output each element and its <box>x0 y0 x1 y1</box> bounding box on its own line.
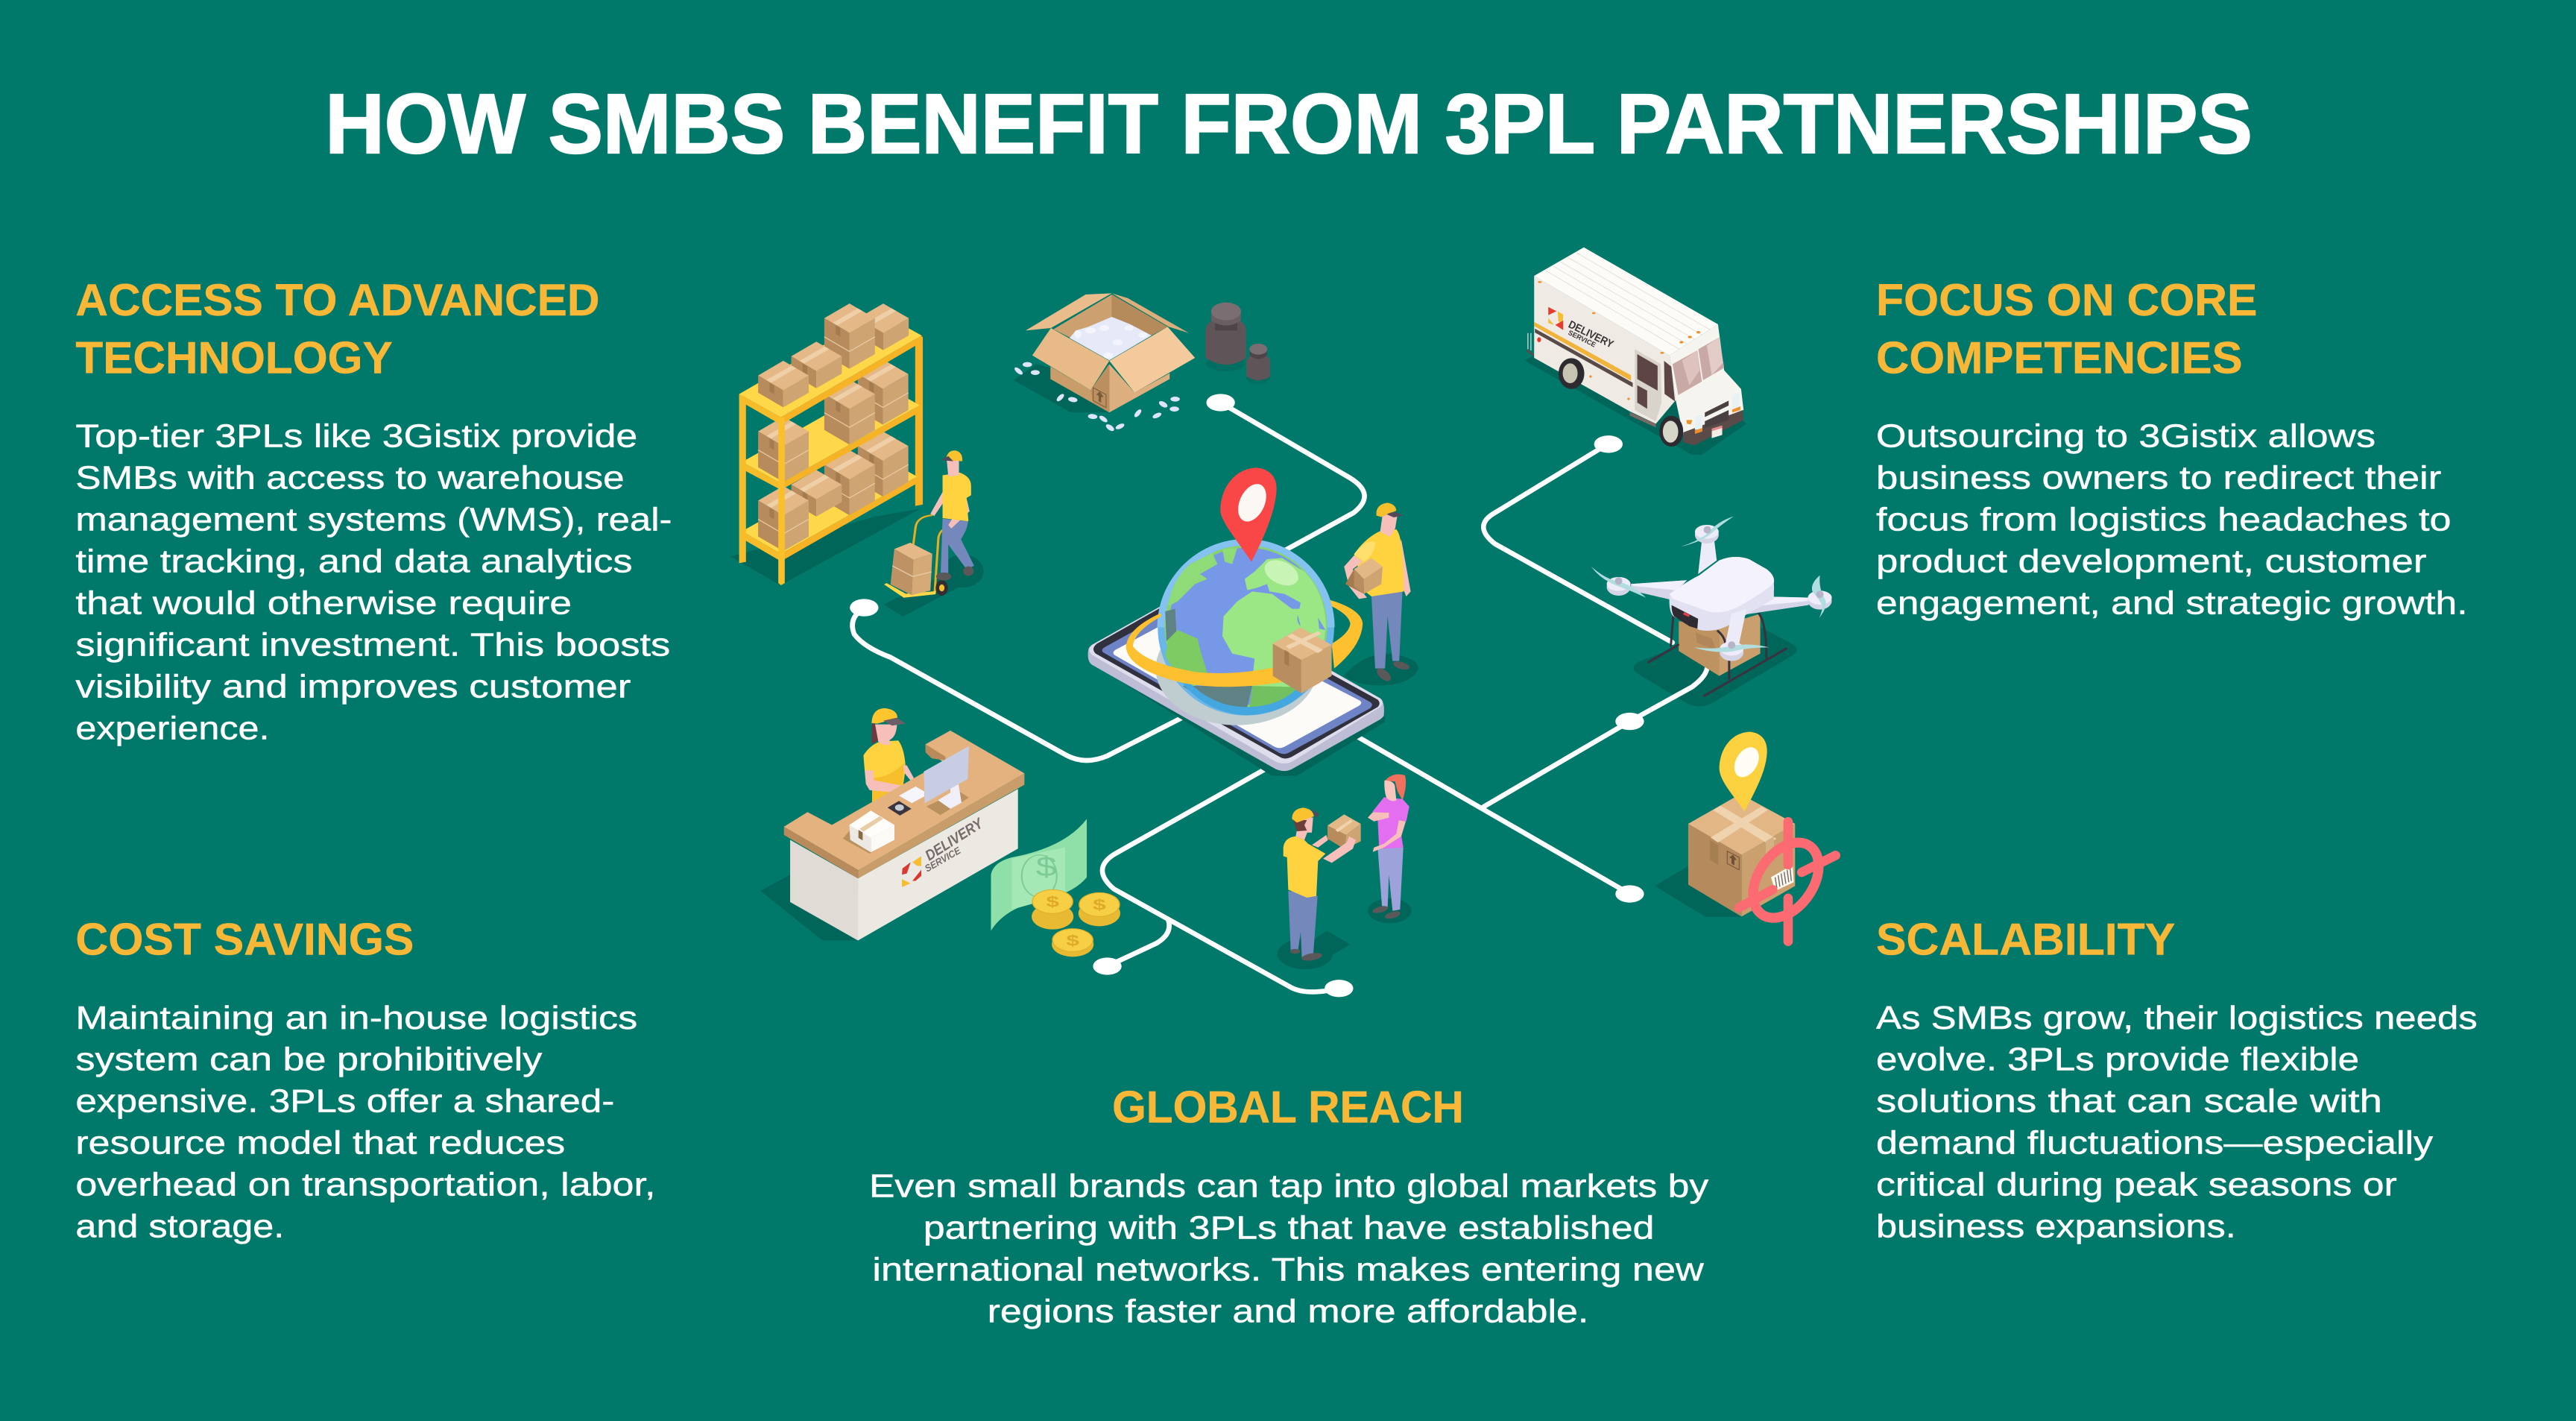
text block: access to advanced technology: significant investment. This boosts <box>75 626 670 663</box>
icon: banknote and coins <box>991 819 1120 957</box>
text block: global reach: regions faster and more affordable. <box>988 1293 1588 1329</box>
text block: scalability: demand fluctuations—especially <box>1876 1125 2433 1162</box>
text block: access to advanced technology: time tracking, and data analytics <box>75 543 633 579</box>
panel: access to advanced technology <box>75 275 672 746</box>
text block: focus on core competencies: product development, customer <box>1876 543 2426 579</box>
icon: warehouse shelf with boxes and worker <box>730 303 984 617</box>
text block: access to advanced technology: experience. <box>75 710 269 746</box>
icon: parcel with location pin and target <box>1655 732 1836 942</box>
text block: scalability: solutions that can scale with <box>1876 1083 2382 1120</box>
globe <box>1158 539 1335 716</box>
clerk <box>863 708 923 803</box>
connector nodes <box>850 394 1644 997</box>
icon: banknote and coins: $ <box>1036 852 1057 882</box>
text block: scalability: As SMBs grow, their logistics needs <box>1876 1000 2478 1036</box>
truck label: DELIVERY <box>1566 319 1615 351</box>
heading: focus on core competencies <box>1876 275 2257 382</box>
text block: access to advanced technology: management systems (WMS), real- <box>75 501 672 538</box>
panel: cost savings <box>75 915 655 1245</box>
heading: global reach: GLOBAL REACH <box>1112 1082 1464 1132</box>
text block: focus on core competencies <box>1876 418 2468 621</box>
worker holding parcel <box>1344 502 1418 685</box>
customer <box>1368 775 1409 920</box>
truck label: SERVICE <box>1567 329 1597 349</box>
text block: focus on core competencies: engagement, and strategic growth. <box>1876 585 2468 621</box>
icon: delivery truck <box>1524 248 1746 455</box>
icon: weights <box>1205 303 1270 384</box>
text block: scalability: evolve. 3PLs provide flexible <box>1876 1042 2359 1078</box>
icon: reception desk with clerk <box>760 708 1024 941</box>
heading: access to advanced technology <box>75 275 599 382</box>
heading: focus on core competencies: FOCUS ON CORE <box>1876 275 2257 325</box>
text block: access to advanced technology <box>75 418 672 746</box>
heading: focus on core competencies: COMPETENCIES <box>1876 333 2243 382</box>
text block: scalability: critical during peak seasons or <box>1876 1167 2397 1203</box>
parcel in hand <box>1328 814 1361 849</box>
desk label: DELIVERY <box>922 815 987 864</box>
text block: access to advanced technology: SMBs with access to warehouse <box>75 459 625 496</box>
text block: cost savings: expensive. 3PLs offer a shared- <box>75 1083 614 1120</box>
text block: scalability <box>1876 1000 2478 1245</box>
panel: focus on core competencies <box>1876 275 2468 621</box>
title: HOW SMBS BENEFIT FROM 3PL PARTNERSHIPS <box>325 77 2253 171</box>
text block: cost savings: resource model that reduces <box>75 1125 565 1162</box>
ring back <box>1327 599 1363 669</box>
text block: focus on core competencies: Outsourcing to 3Gistix allows <box>1876 418 2375 455</box>
shadow: drone <box>1634 626 1797 706</box>
text block: cost savings <box>75 1000 655 1245</box>
text block: focus on core competencies: focus from logistics headaches to <box>1876 501 2451 538</box>
panel: global reach <box>869 1082 1708 1329</box>
heading: access to advanced technology: ACCESS TO ADVANCED <box>75 275 599 325</box>
icon: smartphone with globe <box>1088 467 1418 776</box>
ring front <box>1126 613 1289 687</box>
icon: banknote and coins: $ <box>1066 932 1079 949</box>
heading: cost savings: COST SAVINGS <box>75 915 414 965</box>
icon: banknote and coins: $ <box>1093 896 1106 913</box>
parcel <box>1273 628 1332 693</box>
text block: access to advanced technology: that would otherwise require <box>75 585 572 621</box>
text block: access to advanced technology: Top-tier 3PLs like 3Gistix provide <box>75 418 637 455</box>
text block: cost savings: system can be prohibitively <box>75 1042 543 1078</box>
text block: cost savings: overhead on transportation, labor, <box>75 1167 655 1203</box>
red location pin <box>1220 467 1277 561</box>
icon: courier handing parcel to customer <box>1278 775 1412 969</box>
heading: scalability: SCALABILITY <box>1876 915 2175 965</box>
text block: global reach: partnering with 3PLs that have established <box>924 1209 1655 1246</box>
illustration: central logistics network <box>730 248 1836 997</box>
phone <box>1088 592 1384 771</box>
connector lines <box>853 403 1707 992</box>
icon: open box with packing peanuts <box>1014 293 1195 432</box>
text block: global reach <box>869 1168 1708 1329</box>
text block: global reach: international networks. This makes entering new <box>872 1251 1704 1288</box>
icon: banknote and coins: $ <box>1046 893 1059 910</box>
panel: scalability <box>1876 915 2478 1245</box>
icon: delivery drone <box>1591 517 1832 696</box>
text block: cost savings: Maintaining an in-house logistics <box>75 1000 637 1036</box>
courier <box>1284 807 1328 962</box>
worker with hand truck <box>883 450 984 617</box>
heading: access to advanced technology: TECHNOLOGY <box>75 333 393 382</box>
desk label: SERVICE <box>923 845 963 875</box>
text block: cost savings: and storage. <box>75 1209 284 1245</box>
text block: focus on core competencies: business owners to redirect their <box>1876 459 2441 496</box>
text block: scalability: business expansions. <box>1876 1209 2236 1245</box>
text block: global reach: Even small brands can tap into global markets by <box>869 1168 1708 1204</box>
text block: access to advanced technology: visibility and improves customer <box>75 668 631 705</box>
